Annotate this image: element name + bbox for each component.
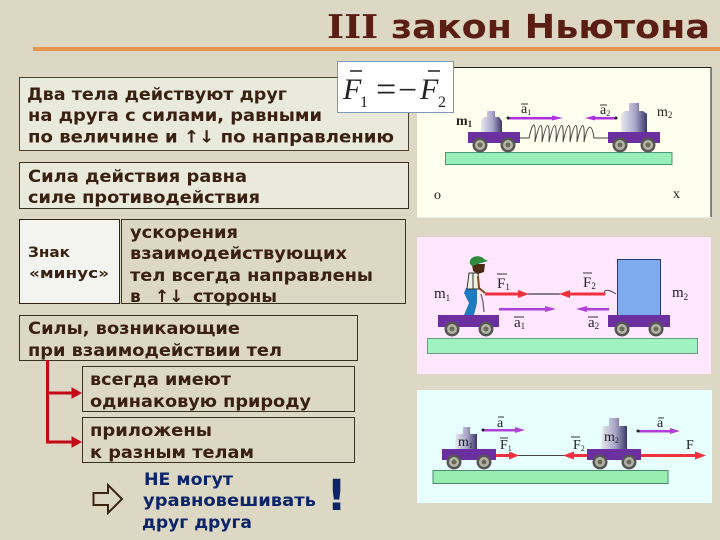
diagram labels: F xyxy=(497,276,505,292)
diagram labels: 2 xyxy=(595,321,599,331)
diagram labels xyxy=(434,102,680,203)
figure: man pulling rope xyxy=(464,256,488,315)
diagram labels: 2 xyxy=(684,292,688,302)
acceleration arrows xyxy=(506,116,618,120)
formula box: = xyxy=(376,69,396,109)
diagram labels: F xyxy=(583,275,591,291)
diagram labels: a xyxy=(514,315,521,331)
panel: action equals reaction: силе противодействия xyxy=(28,188,260,208)
panel: statement about equal and opposite forces: по величине и ↑↓ по направлению xyxy=(28,128,394,148)
diagram labels: a xyxy=(588,315,595,331)
right cart with weight xyxy=(587,418,641,470)
diagram labels: m xyxy=(657,105,668,120)
panel: statement about equal and opposite forces: Два тела действуют друг xyxy=(27,85,287,105)
panel: accelerations explanation: в xyxy=(130,287,141,307)
panel: two connected carts diagram xyxy=(417,390,712,503)
panel: applied to different bodies xyxy=(82,418,354,463)
diagram labels: 1 xyxy=(508,444,512,453)
panel: minus sign label: Знак xyxy=(28,245,70,261)
text: cannot balance each other: уравновешивать xyxy=(143,491,316,511)
acceleration arrows xyxy=(482,427,680,434)
panel: minus sign label xyxy=(20,220,120,304)
connecting line xyxy=(496,454,587,456)
right cart xyxy=(608,315,670,336)
diagram labels: m xyxy=(434,286,446,302)
force arrows xyxy=(485,290,605,298)
left cart with weight xyxy=(442,427,496,470)
text: cannot balance each other: друг друга xyxy=(142,513,252,533)
diagram labels: a xyxy=(600,103,606,118)
panel: forces arising in interaction: Силы, возникающие xyxy=(28,319,240,339)
diagram labels: m xyxy=(456,114,468,129)
panel: man pulling cart diagram xyxy=(417,237,711,374)
panel: forces arising in interaction: при взаимодействии тел xyxy=(28,341,282,361)
diagram labels: 1 xyxy=(446,293,450,303)
panel: accelerations explanation: взаимодействующих xyxy=(130,244,347,264)
diagram labels: 1 xyxy=(468,119,473,129)
panel: accelerations explanation: стороны xyxy=(193,287,277,307)
panel: applied to different bodies: к разным телам xyxy=(90,443,254,463)
diagram labels: x xyxy=(673,187,680,202)
panel: action equals reaction xyxy=(20,162,408,208)
diagram labels: 1 xyxy=(521,321,525,331)
force arrows xyxy=(496,452,706,460)
diagram labels xyxy=(434,273,688,331)
formula box: F xyxy=(419,73,439,106)
diagram labels: F xyxy=(686,438,694,453)
panel: action equals reaction: Сила действия равна xyxy=(28,167,247,187)
panel: same nature xyxy=(82,366,354,412)
panel: accelerations explanation: ↑↓ xyxy=(155,287,184,307)
panel: accelerations explanation: ускорения xyxy=(130,223,238,243)
left cart xyxy=(438,315,499,336)
ground xyxy=(428,338,698,354)
panel: statement about equal and opposite forces: на друга с силами, равными xyxy=(28,106,322,126)
formula box: − xyxy=(398,72,417,109)
blue block xyxy=(618,260,660,316)
panel: spring carts diagram xyxy=(417,68,711,218)
formula box: F xyxy=(342,73,362,106)
diagram labels: F xyxy=(500,438,508,453)
diagram labels: m xyxy=(672,285,684,301)
diagram labels: 1 xyxy=(505,282,510,292)
panel: accelerations explanation xyxy=(122,220,406,307)
panel: accelerations explanation: тел всегда направлены xyxy=(130,266,373,286)
diagram labels: a xyxy=(657,416,664,431)
diagram labels: o xyxy=(434,188,441,203)
panel: same nature: одинаковую природу xyxy=(90,392,311,412)
diagram labels: a xyxy=(521,102,527,117)
exclamation mark: ! xyxy=(327,471,346,521)
title: III закон Ньютона xyxy=(327,7,710,46)
formula box xyxy=(338,62,454,112)
right cart with weight: m xyxy=(604,430,615,445)
diagram labels: 2 xyxy=(606,109,610,118)
diagram labels: F xyxy=(573,438,581,453)
panel: minus sign label: «минус» xyxy=(29,266,109,282)
ground xyxy=(446,152,672,164)
diagram labels: 2 xyxy=(668,110,672,120)
cart with large weight xyxy=(608,103,660,152)
left cart with weight: 1 xyxy=(469,441,473,450)
icon: hollow arrow xyxy=(94,485,122,513)
ground xyxy=(433,470,668,484)
panel: same nature: всегда имеют xyxy=(90,370,231,390)
diagram labels: 1 xyxy=(527,108,531,117)
diagram labels: a xyxy=(497,416,504,431)
right cart with weight: 2 xyxy=(615,436,619,445)
title underline xyxy=(33,47,720,51)
panel: forces arising in interaction xyxy=(20,316,358,361)
formula box: 2 xyxy=(438,94,446,111)
spring xyxy=(520,125,608,142)
acceleration arrows xyxy=(499,306,609,312)
left cart with weight: m xyxy=(458,435,469,450)
panel: applied to different bodies: приложены xyxy=(90,421,212,441)
red connector arrows xyxy=(48,360,81,447)
text: cannot balance each other: НЕ могут xyxy=(144,470,233,490)
formula box: 1 xyxy=(360,94,368,111)
diagram labels: 2 xyxy=(591,281,596,291)
diagram labels xyxy=(497,416,694,453)
diagram labels: 2 xyxy=(581,444,585,453)
rope xyxy=(485,293,605,295)
panel: statement about equal and opposite forces xyxy=(20,78,408,150)
cart with small weight xyxy=(468,111,520,152)
text: cannot balance each other xyxy=(142,470,316,533)
